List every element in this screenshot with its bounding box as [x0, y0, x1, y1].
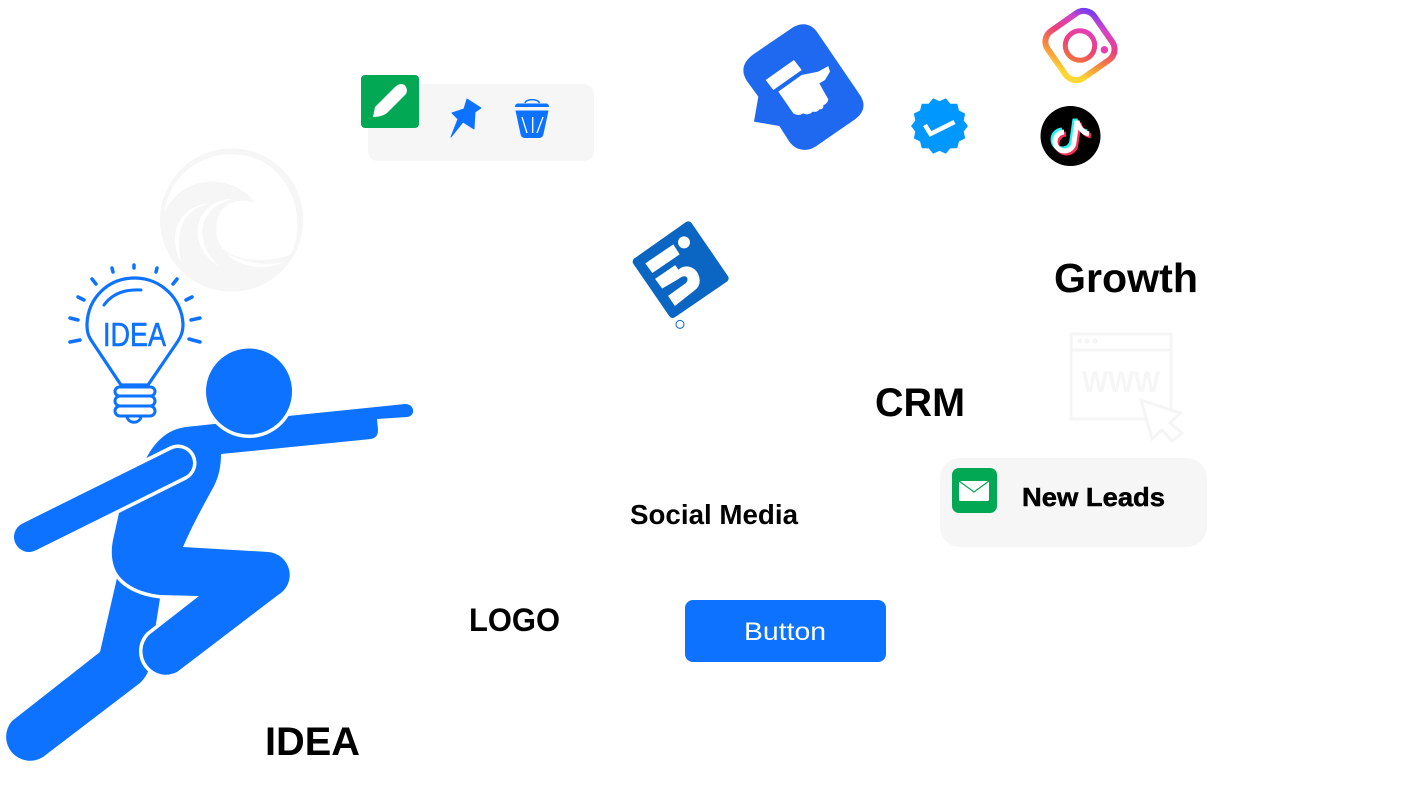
button: Button	[744, 618, 826, 646]
icon: faint www browser window: WWW	[1082, 366, 1161, 399]
icon: pin	[451, 99, 481, 137]
icon: trash can	[515, 100, 549, 138]
head	[206, 348, 292, 434]
head outline	[202, 345, 296, 438]
heading: LOGO: LOGO	[469, 602, 560, 638]
bulb label: IDEA	[103, 316, 166, 353]
new leads label: New Leads	[1022, 482, 1165, 512]
heading: Social Media: Social Media	[630, 499, 798, 530]
icon: thumbs up speech bubble	[743, 24, 864, 150]
icon: tiktok	[1040, 106, 1100, 166]
icon: mail tile	[952, 468, 997, 513]
heading: CRM: CRM	[875, 381, 965, 425]
panel: new leads	[940, 458, 1207, 547]
icon: green pencil tile	[361, 75, 419, 128]
icon: instagram	[1040, 6, 1120, 85]
panel: edit toolbar	[361, 75, 594, 161]
torso, pointing arm and front thigh	[112, 404, 413, 675]
heading: IDEA: IDEA	[265, 720, 360, 764]
icon: faint wave logo	[160, 148, 303, 292]
icon: idea light bulb	[70, 265, 200, 422]
icon: verified badge	[912, 99, 967, 153]
button	[685, 600, 886, 662]
icon: linkedin	[637, 225, 725, 328]
heading: Growth: Growth	[1054, 255, 1198, 301]
back leg	[6, 578, 161, 761]
icon: faint www browser window	[1071, 334, 1182, 441]
rear arm	[29, 463, 178, 537]
illustration: running figure pointing	[6, 345, 413, 761]
